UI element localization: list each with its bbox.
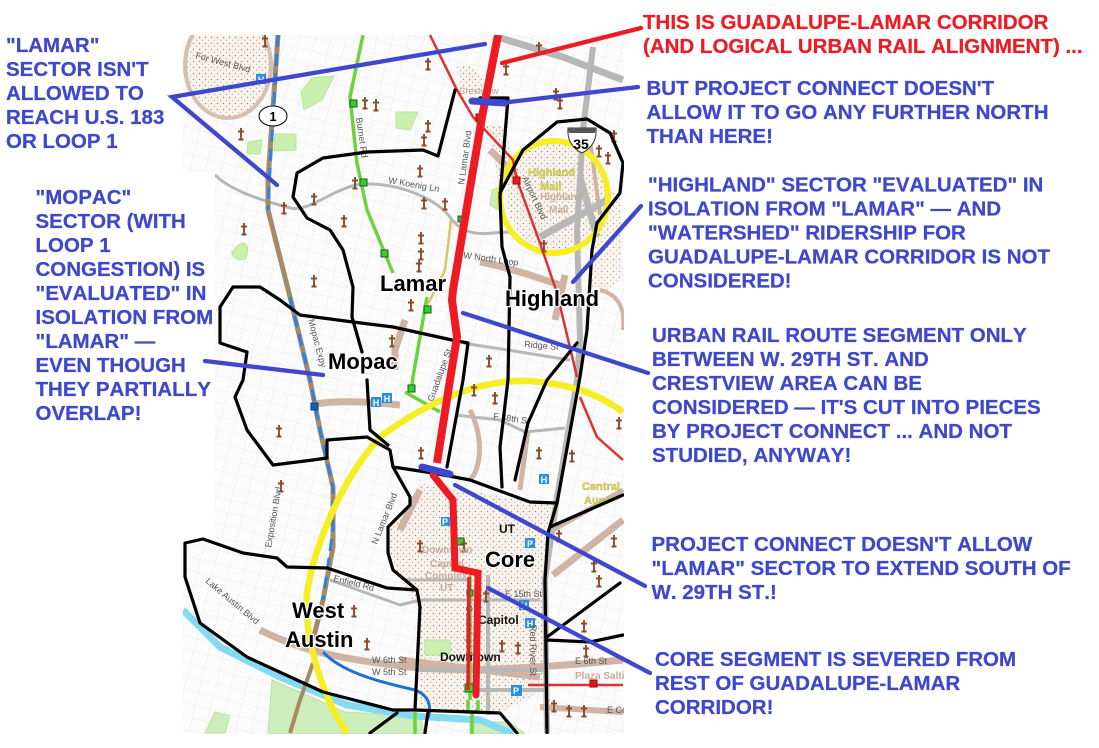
map place and street labels: Downtown [422, 545, 473, 556]
map place and street labels: Mall [549, 205, 569, 216]
map place and street labels: Ridge St [524, 339, 560, 352]
map place and street labels: E 15th St [505, 589, 543, 599]
text block: northern limit note: ALLOW IT TO GO ANY FURTHER NORTH [646, 101, 1048, 124]
icons: hospitals and parking [256, 74, 549, 696]
arrow: northern limit bar and leader [472, 87, 638, 103]
map place and street labels: Airport Blvd [520, 175, 549, 221]
arrow: Lamar callout to U.S. 183 and Loop 1 [172, 44, 485, 185]
text block: northern limit note: THAN HERE! [646, 125, 773, 148]
text block: core segment note: CORRIDOR! [655, 696, 773, 719]
main thick red corridor [433, 35, 498, 695]
map place and street labels: E 6th St [575, 656, 608, 666]
sector labels: Lamar [380, 271, 446, 296]
text block: core segment note: REST OF GUADALUPE-LAMAR [655, 672, 960, 695]
map place and street labels: Guadalupe St [464, 605, 474, 661]
green bus line [350, 35, 478, 734]
text block: Highland sector note: "WATERSHED" RIDERSHIP FOR [648, 222, 966, 244]
text block: Lamar sector note: "LAMAR" [6, 34, 99, 57]
text block: Mopac sector note: ISOLATION FROM [36, 306, 213, 329]
icons: hospitals and parking: H [373, 398, 379, 408]
text block: Lamar sector note: ALLOWED TO [6, 82, 144, 105]
map place and street labels: N Lamar Blvd [456, 130, 474, 185]
map place and street labels: Plaza Saltillo [575, 671, 636, 682]
text block: urban rail segment note: CONSIDERED — IT'S CUT INTO PIECES [652, 396, 1041, 419]
text block: Mopac sector note: CONGESTION) IS [36, 258, 205, 281]
map place and street labels: W Koenig Ln [388, 175, 440, 194]
speckled urban areas [185, 12, 623, 712]
map place and street labels: Mopac Expy [306, 318, 329, 369]
icons: hospitals and parking: P [527, 539, 533, 549]
map place and street labels: Highland [528, 167, 575, 179]
text block: Mopac sector note: EVEN THOUGH [36, 354, 186, 377]
text block: Highland sector note: ISOLATION FROM "LAMAR" — AND [648, 198, 1001, 220]
text block: Mopac sector note: THEY PARTIALLY [36, 378, 211, 401]
thin red rail line [430, 35, 623, 685]
text block: urban rail segment note: STUDIED, ANYWAY! [652, 444, 851, 467]
arrow: urban rail segment callout [463, 313, 648, 373]
icons: hospitals and parking: P [442, 517, 448, 527]
icons: hospitals and parking: H [527, 619, 533, 629]
text block: Mopac sector note: OVERLAP! [36, 402, 141, 425]
icons: hospitals and parking: P [513, 686, 519, 696]
map place and street labels: F 38th St [493, 411, 531, 426]
text block: urban rail segment note: URBAN RAIL ROUTE SEGMENT ONLY [652, 324, 1027, 347]
text block: red corridor heading: THIS IS GUADALUPE-LAMAR CORRIDOR [643, 11, 1049, 34]
map place and street labels: Enfield Rd [333, 573, 375, 593]
text block: Mopac sector note: "EVALUATED" IN [36, 282, 206, 305]
icons: hospitals and parking: H [258, 75, 264, 85]
sector labels: Core [485, 547, 535, 572]
text block: Highland sector note: GUADALUPE-LAMAR CORRIDOR IS NOT [648, 246, 1050, 268]
arrow: core segment callout [488, 588, 650, 673]
icons: transit stations [311, 100, 597, 692]
map place and street labels: Downtown [440, 650, 501, 664]
icons: churches [238, 35, 622, 717]
icon: highway 1 shield: 1 [269, 109, 277, 124]
parks and green spaces [205, 76, 525, 734]
map place and street labels: Red River St [528, 625, 538, 677]
icons: hospitals and parking: H [384, 394, 390, 404]
text block: urban rail segment note: CRESTVIEW AREA CAN BE [652, 372, 922, 395]
map place and street labels: Exposition Blvd [263, 486, 284, 548]
sector labels: Highland [505, 286, 599, 311]
map place and street labels: Burnet Rd [354, 117, 370, 158]
arrow: southern limit bar and leader [422, 467, 645, 586]
map place and street labels: E Ce [607, 705, 627, 715]
map place and street labels: W 6th St [372, 655, 407, 665]
panel: street map [183, 12, 636, 734]
map place and street labels: UT [440, 583, 453, 594]
map place and street labels: Highland [540, 192, 583, 203]
map place and street labels: N Lamar Blvd [370, 491, 399, 546]
icon: highway 1 shield [259, 106, 287, 126]
text block: southern limit note: W. 29TH ST.! [652, 581, 777, 604]
map place and street labels: Central [582, 481, 620, 493]
yellow Highland Mall ring [500, 141, 608, 253]
text block: Mopac sector note: LOOP 1 [36, 234, 111, 257]
text block: Mopac sector note: "MOPAC" [36, 186, 131, 209]
map place and street labels: W North Loop [463, 250, 519, 268]
MoPac expressway line [268, 35, 429, 733]
brown arterial roads [260, 140, 623, 712]
sector labels: Austin [285, 627, 353, 652]
text block: red corridor heading: (AND LOGICAL URBAN RAIL ALIGNMENT) ... [643, 35, 1083, 58]
map place and street labels: Crestview [459, 86, 499, 96]
yellow corridor arc [307, 381, 623, 733]
map place and street labels: Mall [540, 181, 561, 193]
map base with street grid [183, 35, 624, 734]
icons: hospitals and parking: H [541, 475, 547, 485]
sector boundary outlines [185, 90, 623, 733]
map place and street labels: For West Blvd [194, 50, 252, 75]
map place and street labels: Aust [584, 495, 609, 507]
arrow: Mopac callout [205, 361, 323, 375]
arrow: corridor callout [502, 28, 641, 63]
text block: Lamar sector note: REACH U.S. 183 [6, 106, 164, 129]
text block: Lamar sector note: OR LOOP 1 [6, 130, 118, 153]
text block: northern limit note: BUT PROJECT CONNECT DOESN'T [646, 77, 995, 100]
map place and street labels: Lake Austin Blvd [204, 576, 261, 626]
text block: core segment note: CORE SEGMENT IS SEVERED FROM [655, 648, 1016, 671]
gray local highways [215, 37, 623, 733]
icons: hospitals and parking: H [521, 601, 527, 611]
text block: southern limit note: PROJECT CONNECT DOESN'T ALLOW [652, 533, 1033, 556]
text block: urban rail segment note: BETWEEN W. 29TH ST. AND [652, 348, 929, 371]
map place and street labels: Complex [425, 571, 468, 582]
text block: Mopac sector note: "LAMAR" — [36, 330, 156, 353]
text block: southern limit note: "LAMAR" SECTOR TO EXTEND SOUTH OF [652, 557, 1071, 580]
map place and street labels: Capitol [430, 559, 464, 570]
map place and street labels: Guadalupe St [425, 347, 454, 403]
text block: urban rail segment note: BY PROJECT CONNECT ... AND NOT [652, 420, 1012, 443]
sector labels: Mopac [328, 349, 398, 374]
text block: Highland sector note: "HIGHLAND" SECTOR "EVALUATED" IN [648, 174, 1043, 196]
map place and street labels [194, 50, 636, 715]
river [183, 610, 513, 734]
sector labels: West [292, 598, 345, 623]
icon: interstate 35 shield [568, 128, 596, 153]
text block: Highland sector note: CONSIDERED! [648, 270, 792, 292]
text block: Mopac sector note: SECTOR (WITH [36, 210, 186, 233]
arrow: Highland callout [573, 206, 641, 282]
text block: Lamar sector note: SECTOR ISN'T [6, 58, 149, 81]
map place and street labels: UT [499, 522, 516, 536]
map place and street labels: Capitol [478, 613, 519, 627]
map place and street labels: W 5th St [372, 667, 407, 677]
sector labels [285, 271, 599, 652]
icon: interstate 35 shield: 35 [573, 136, 589, 152]
